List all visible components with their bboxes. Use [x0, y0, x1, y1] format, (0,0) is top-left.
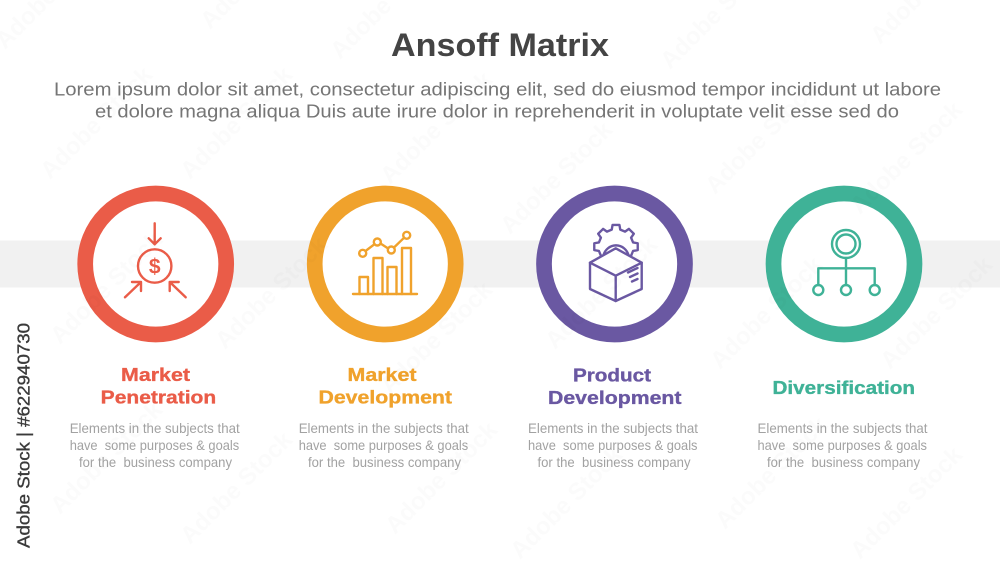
heading: market penetration — [101, 364, 216, 408]
subtitle text — [54, 78, 941, 122]
description: market development — [299, 420, 469, 470]
heading: diversification: Diversification — [772, 377, 915, 398]
heading: market penetration: Market — [121, 364, 190, 385]
description: product development — [528, 420, 698, 470]
description: market penetration — [70, 420, 240, 470]
heading: product development — [548, 364, 682, 408]
ring: market development — [315, 194, 456, 334]
panel: product development — [528, 194, 698, 470]
description: market penetration: have some purposes & goals — [70, 437, 239, 453]
heading: product development: Product — [573, 364, 651, 386]
panel: market penetration — [70, 194, 240, 470]
description: market development: have some purposes & goals — [299, 437, 468, 453]
icon: gear and box — [590, 225, 642, 301]
heading: market development: Market — [348, 364, 416, 385]
description: diversification: have some purposes & goals — [758, 437, 927, 453]
description: diversification — [758, 420, 928, 470]
subtitle text: Lorem ipsum dolor sit amet, consectetur adipiscing elit, sed do eiusmod tempor incididunt ut labore — [54, 78, 941, 100]
description: product development: for the business company — [538, 454, 690, 470]
watermark: adobe stock id: Adobe Stock | #622940730 — [14, 323, 34, 548]
heading: market development: Development — [318, 386, 452, 408]
panel: market development — [299, 194, 469, 470]
description: diversification: Elements in the subjects that — [758, 420, 928, 436]
description: diversification: for the business company — [767, 454, 920, 470]
background band — [0, 240, 1000, 288]
icon: dollar with inward arrows — [125, 223, 186, 297]
description: product development: have some purposes & goals — [528, 437, 698, 453]
title: Ansoff Matrix — [391, 27, 609, 63]
icon: network hierarchy — [813, 230, 880, 295]
ring: product development — [544, 194, 685, 334]
icon: dollar with inward arrows: $ — [149, 256, 161, 278]
heading: market penetration: Penetration — [101, 386, 216, 408]
description: market development: Elements in the subjects that — [299, 420, 469, 436]
ring: diversification — [774, 194, 914, 334]
description: product development: Elements in the subjects that — [528, 420, 698, 436]
heading: market development — [318, 364, 452, 408]
description: market penetration: Elements in the subjects that — [70, 420, 240, 436]
panel: diversification — [758, 194, 928, 470]
description: market penetration: for the business company — [79, 454, 232, 470]
heading: product development: Development — [548, 387, 682, 408]
icon: bar chart with trend line — [353, 232, 417, 294]
description: market development: for the business company — [308, 454, 461, 470]
ring: market penetration — [85, 194, 226, 334]
subtitle text: et dolore magna aliqua Duis aute irure dolor in reprehenderit in voluptate velit esse sed do — [95, 100, 899, 122]
